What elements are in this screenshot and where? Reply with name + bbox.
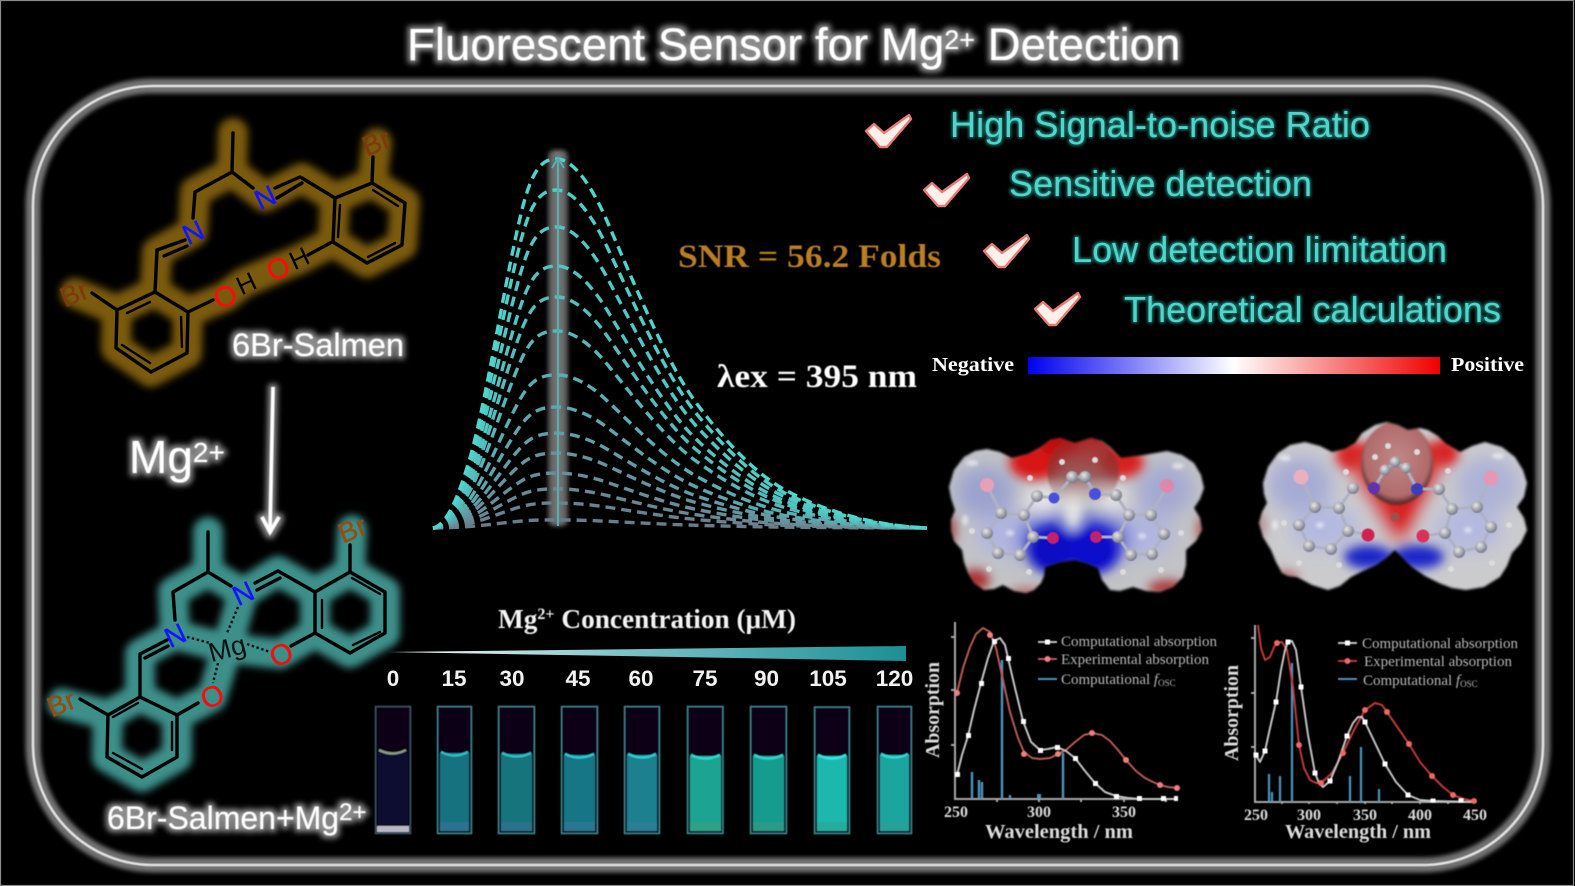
experimental curve xyxy=(1258,625,1474,801)
concentration labels: 75 xyxy=(692,666,718,691)
tick labels: 350 xyxy=(1353,807,1377,824)
oscillator bars xyxy=(972,660,1063,799)
arrow: Mg2+ addition xyxy=(262,387,279,532)
atom labels: N xyxy=(160,617,191,654)
atom labels xyxy=(42,510,371,723)
label negative: Negative xyxy=(932,354,1014,376)
feature list xyxy=(866,104,1501,330)
legend: OSC xyxy=(1460,679,1478,689)
title: Detection xyxy=(975,19,1180,70)
check icon 1 xyxy=(866,115,911,147)
y axis title: Absorption xyxy=(922,662,944,758)
colour scale xyxy=(1028,357,1440,374)
molecule: 6Br-Salmen+Mg2+ complex xyxy=(42,510,385,777)
glossy highlights xyxy=(1272,453,1504,533)
cuvette row xyxy=(376,706,912,834)
atom labels: Br xyxy=(333,510,371,549)
experimental markers xyxy=(1274,640,1477,804)
tick labels: 350 xyxy=(1112,804,1136,821)
ESP surface: right molecule xyxy=(1257,420,1529,592)
legend: Computational absorption xyxy=(1061,634,1217,650)
tick labels: 300 xyxy=(1027,804,1051,821)
vertical arrow xyxy=(552,158,564,526)
molecule: 6Br-Salmen xyxy=(55,123,405,372)
cuvette 60 xyxy=(624,706,660,834)
electrostatic potential legend xyxy=(932,354,1524,376)
SNR annotation: SNR = 56.2 Folds xyxy=(678,239,941,275)
absorption chart: left xyxy=(922,622,1217,843)
tick labels xyxy=(1244,807,1487,824)
cuvette 90 xyxy=(750,706,786,834)
molecule glow xyxy=(62,530,385,777)
atom labels: Br xyxy=(55,274,93,313)
computational curve xyxy=(1256,641,1475,802)
concentration labels: 90 xyxy=(754,666,779,691)
feature text 3: Low detection limitation xyxy=(1072,229,1447,270)
legend: OSC xyxy=(1158,678,1176,688)
computational markers xyxy=(1254,640,1464,802)
atoms and bonds xyxy=(969,457,1184,575)
cuvette 30 xyxy=(498,706,534,834)
axes xyxy=(951,622,1177,802)
tick labels: 250 xyxy=(944,804,968,821)
cuvette 45 xyxy=(562,706,598,834)
label positive: Positive xyxy=(1451,354,1524,376)
surface xyxy=(1257,420,1529,592)
tick labels: 450 xyxy=(1463,807,1487,824)
label: 6Br-Salmen+Mg2+: 2+ xyxy=(339,799,366,826)
feature text 2: Sensitive detection xyxy=(1009,163,1312,204)
concentration labels: 60 xyxy=(628,666,654,691)
legend xyxy=(1338,636,1518,689)
cuvette 0 xyxy=(376,706,410,834)
atom labels: Mg xyxy=(205,629,249,668)
atom labels: H xyxy=(284,241,314,276)
cuvette 120 xyxy=(878,706,912,834)
excitation beam xyxy=(548,150,568,526)
translucent bubble xyxy=(1361,421,1433,505)
computational markers xyxy=(955,639,1178,801)
emission spectra chart xyxy=(433,150,927,528)
skeleton bonds xyxy=(92,133,405,372)
concentration heading: Mg xyxy=(498,604,537,634)
feature text 1: High Signal-to-noise Ratio xyxy=(950,104,1370,145)
concentration labels: 30 xyxy=(499,666,525,691)
atom labels: O xyxy=(209,278,243,317)
title: 2+ xyxy=(944,25,975,55)
experimental curve xyxy=(957,628,1177,788)
atom labels: H xyxy=(231,266,261,301)
legend: Experimental absorption xyxy=(1061,652,1209,668)
absorption chart: right xyxy=(1221,625,1518,843)
oscillator bars xyxy=(1269,663,1379,802)
atom labels: O xyxy=(265,636,299,675)
translucent bubble xyxy=(1047,436,1119,508)
check icon 2 xyxy=(924,174,969,206)
x axis title: Wavelength / nm xyxy=(1285,821,1431,843)
concentration heading: 2+ xyxy=(537,606,555,623)
axes xyxy=(1251,625,1475,804)
atoms and bonds xyxy=(1281,443,1512,572)
concentration heading: Concentration (μM) xyxy=(555,604,796,634)
check icon 3 xyxy=(984,235,1029,267)
atom labels: N xyxy=(250,179,281,216)
concentration labels: 45 xyxy=(565,666,591,691)
experimental markers xyxy=(954,632,1180,791)
glossy highlights xyxy=(962,460,1184,539)
atom labels xyxy=(55,123,395,317)
emission curves xyxy=(433,159,927,528)
concentration labels: 120 xyxy=(876,666,913,691)
coordination bonds xyxy=(187,607,270,683)
skeleton bonds xyxy=(80,532,385,777)
label: 6Br-Salmen+Mg2+: 6Br-Salmen+Mg xyxy=(107,800,339,836)
surface xyxy=(947,436,1206,595)
cuvette 75 xyxy=(688,706,723,834)
y axis title: Absorption xyxy=(1221,665,1243,761)
legend: Computational f xyxy=(1363,673,1460,689)
atom labels: Br xyxy=(42,684,80,723)
molecule glow xyxy=(75,133,405,372)
concentration labels xyxy=(387,666,913,691)
concentration labels: 105 xyxy=(809,666,847,691)
atom labels: O xyxy=(262,250,296,289)
excitation wavelength annotation: λex = 395 nm xyxy=(717,359,917,395)
legend: Computational f xyxy=(1061,672,1158,688)
label: Mg2+: Mg xyxy=(129,431,193,483)
tick labels xyxy=(944,804,1136,821)
cuvette 105 xyxy=(814,707,850,834)
check icon 4 xyxy=(1035,293,1080,325)
tick labels: 250 xyxy=(1244,807,1268,824)
legend xyxy=(1038,634,1217,688)
feature text 4: Theoretical calculations xyxy=(1124,289,1501,330)
atom labels: Br xyxy=(357,123,395,162)
atom labels: N xyxy=(228,575,259,612)
x axis title: Wavelength / nm xyxy=(985,821,1133,843)
label: Mg2+: 2+ xyxy=(193,437,225,468)
concentration labels: 15 xyxy=(441,666,467,691)
label: 6Br-Salmen: 6Br-Salmen xyxy=(232,327,404,363)
tick labels: 300 xyxy=(1297,807,1321,824)
concentration labels: 0 xyxy=(387,666,399,691)
cuvette 15 xyxy=(438,706,472,834)
computational curve xyxy=(957,638,1177,799)
tick labels: 400 xyxy=(1408,807,1432,824)
ESP surface: left molecule xyxy=(947,436,1206,595)
atom labels: N xyxy=(178,214,209,251)
legend: Computational absorption xyxy=(1362,636,1518,652)
legend: Experimental absorption xyxy=(1364,654,1512,670)
atom labels: O xyxy=(196,678,230,717)
title: Fluorescent Sensor for Mg xyxy=(407,19,944,70)
concentration wedge xyxy=(388,646,906,661)
